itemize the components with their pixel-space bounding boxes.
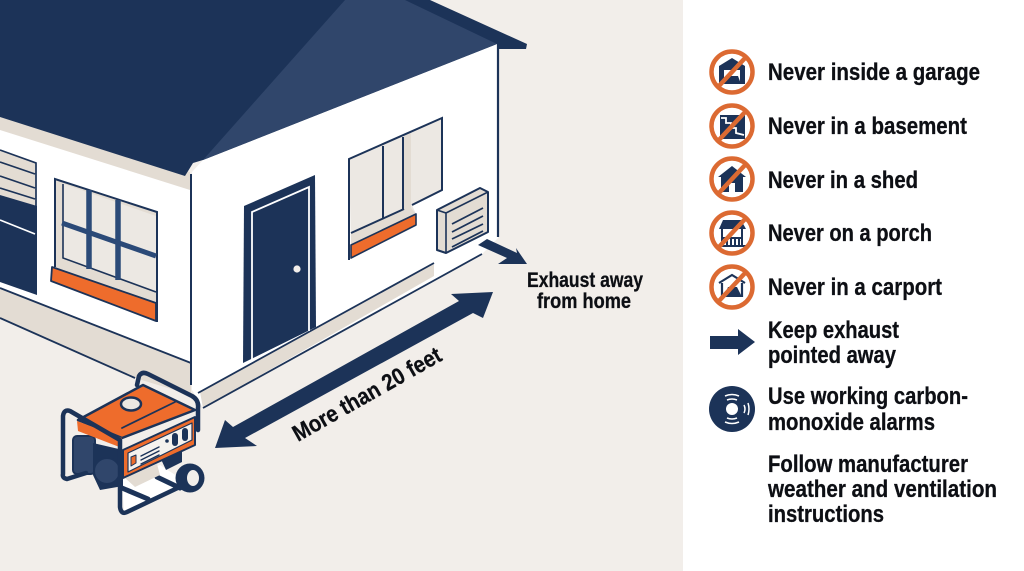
right wall — [192, 44, 498, 408]
icon: arrow — [710, 329, 755, 355]
item: follow manufacturer instructions: Follow manufacturer — [768, 451, 968, 478]
item: carbon monoxide alarms: Use working carbon- — [768, 383, 968, 410]
far-left window — [0, 150, 37, 295]
control panel — [123, 417, 195, 478]
item: never in a basement — [712, 106, 967, 146]
arrow: exhaust direction — [478, 239, 527, 264]
icon: no carport — [712, 266, 752, 308]
arrow: distance — [215, 292, 493, 448]
icon: no shed — [712, 158, 752, 200]
window sill — [351, 214, 416, 258]
item: never in a shed: Never in a shed — [768, 167, 918, 194]
item: never in a shed — [712, 158, 918, 200]
item: keep exhaust pointed away: Keep exhaust — [768, 317, 899, 344]
item: keep exhaust pointed away: pointed away — [768, 342, 896, 369]
item: never on a porch — [712, 212, 932, 254]
front frame — [63, 411, 186, 513]
item: follow manufacturer instructions: instructions — [768, 501, 884, 528]
label: more than 20 feet: More than 20 feet — [288, 341, 446, 446]
item: never inside a garage — [712, 52, 980, 92]
panel: safety list — [709, 52, 997, 528]
item: never in a carport: Never in a carport — [768, 274, 942, 301]
tank — [78, 385, 195, 438]
roof eave band — [0, 117, 190, 190]
left foundation — [0, 288, 191, 395]
generator base — [122, 465, 186, 512]
illustration: house — [0, 0, 527, 408]
left wall — [0, 117, 192, 366]
item: never on a porch: Never on a porch — [768, 220, 932, 247]
right foundation — [200, 264, 434, 408]
roof — [0, 0, 527, 176]
item: keep exhaust pointed away — [710, 317, 899, 369]
icon: no garage — [712, 52, 752, 92]
item: never inside a garage: Never inside a garage — [768, 59, 980, 86]
window sill — [51, 267, 156, 321]
item: never in a basement: Never in a basement — [768, 113, 967, 140]
icon: no basement — [712, 106, 752, 146]
wall vent — [437, 188, 488, 253]
engine block — [73, 436, 95, 474]
roof lighter facet — [203, 0, 497, 160]
left window — [51, 179, 157, 322]
item: follow manufacturer instructions — [767, 451, 997, 528]
back frame — [137, 373, 198, 430]
wheel — [176, 464, 204, 492]
label: exhaust away from home — [527, 269, 643, 313]
label: exhaust away from home: from home — [537, 290, 631, 313]
icon: no porch — [712, 212, 752, 254]
item: carbon monoxide alarms: monoxide alarms — [768, 409, 935, 436]
right window — [349, 118, 442, 260]
item: carbon monoxide alarms — [709, 383, 968, 436]
illustration: generator — [63, 373, 205, 513]
label: exhaust away from home: Exhaust away — [527, 269, 643, 292]
item: never in a carport — [712, 266, 942, 308]
panel: scene background — [0, 0, 683, 571]
icon: alarm — [709, 386, 755, 432]
door — [243, 175, 316, 363]
